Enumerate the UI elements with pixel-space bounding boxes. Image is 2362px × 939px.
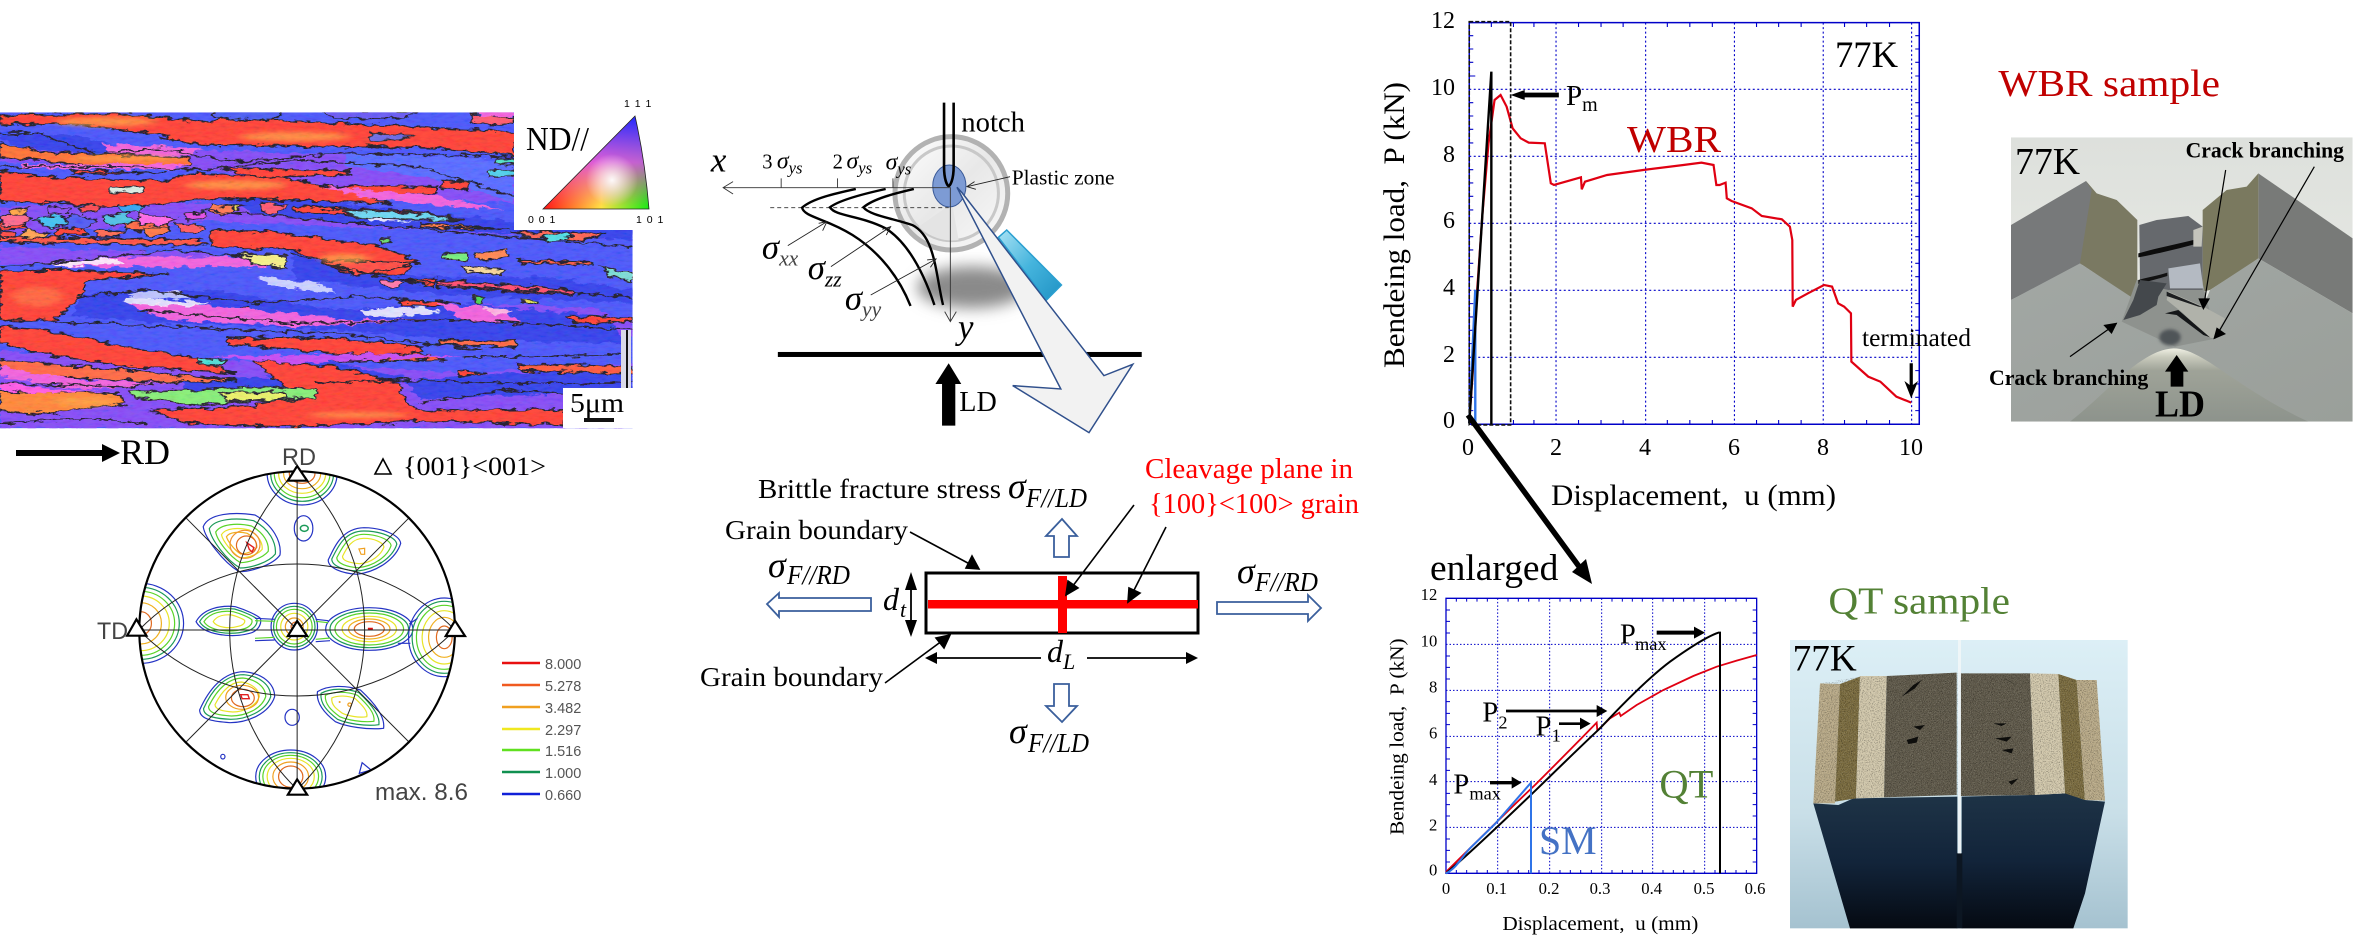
axis labels: σ [845,278,862,317]
tick labels: 0.6 [1745,879,1765,898]
panel: cleavage grain schematic [700,453,1359,758]
contour legend: 5.278 [545,679,581,695]
y axis tick labels: 8 [1443,142,1455,168]
QT temperature label: 77K [1793,639,1857,680]
pole labels: max. 8.6 [375,779,468,806]
axis labels: σ [847,148,858,174]
panel: WBR sample photo [1989,63,2353,426]
grain boundary labels: Grain boundary [725,515,909,545]
tick labels: 10 [1421,632,1437,651]
RD arrow label [16,432,170,472]
contour plot [125,463,467,796]
arrow: enlarge pointer [1468,415,1592,584]
brittle stress label: Brittle fracture stress [758,474,1001,504]
cleavage label: {100}<100> grain [1149,488,1359,520]
terminated label: terminated [1862,325,1972,352]
tick labels: 0.1 [1486,879,1507,898]
contour legend: 1.000 [545,766,581,782]
brittle stress label: F//LD [1025,483,1087,513]
LD arrow: LD [959,387,997,418]
tick labels: 0.4 [1641,879,1663,898]
crack pointers and load arrow [2070,167,2314,387]
dimension d_t [883,572,917,637]
panel: EBSD orientation map [0,98,664,472]
tick labels: 2 [1429,816,1437,835]
load point annotations: max [1469,783,1501,803]
fractured WBR specimen photo [2011,137,2353,422]
y axis tick labels: 2 [1443,342,1455,368]
axis labels: x [710,141,727,180]
cleavage label [1145,453,1359,520]
y axis tick labels [1431,8,1455,434]
pole labels [97,444,468,806]
grain boundary labels [700,515,909,692]
tick labels: 12 [1421,585,1437,604]
stress labels: F//RD [1254,567,1318,597]
load point annotations [1453,619,1705,803]
grain rectangle [926,573,1198,633]
texture orientation key: {001}<001> [403,452,546,481]
axis titles: Displacement, u (mm) [1502,913,1698,935]
series labels: QT [1659,761,1713,806]
axis labels: yy [860,298,882,322]
dimension d_t: d [883,581,900,617]
x axis tick labels: 2 [1550,435,1562,461]
grain boundary labels: Grain boundary [700,662,884,692]
y axis tick labels: 12 [1431,8,1455,34]
series labels [1539,761,1713,863]
black pointer arrows [885,505,1166,683]
contour legend: 8.000 [545,657,581,673]
sample labels [1989,139,2344,426]
axis labels: zz [824,267,842,291]
axis labels: 2 [833,151,843,173]
load point annotations: P [1482,698,1498,729]
axis labels: 3 [762,151,773,173]
dimension d_L: d [1047,633,1064,669]
tick labels: 4 [1429,770,1438,789]
inset: ND inverse pole figure: 0 0 1 [528,214,556,226]
dimension d_t: t [900,597,907,622]
panel: QT sample photo [1790,580,2128,928]
axis labels: y [955,307,974,346]
load point annotations: P [1620,619,1636,650]
axes [723,178,956,322]
tick labels: 8 [1429,678,1437,697]
stress labels: F//LD [1027,728,1089,758]
inset: ND inverse pole figure: 1 0 1 [636,214,664,226]
pole labels: RD [282,444,316,471]
inset: ND inverse pole figure: 1 1 1 [624,98,652,110]
tick labels: 0.5 [1694,879,1714,898]
chart plot area [1469,22,1919,425]
contour legend: 3.482 [545,701,581,717]
stress labels: F//RD [786,560,850,590]
stress labels: σ [1237,551,1256,591]
sample labels: LD [2155,384,2205,426]
WBR sample title: WBR sample [1998,63,2220,105]
hollow stress arrows [767,519,1321,722]
axis labels: ys [895,159,911,178]
x axis tick labels [1462,435,1923,461]
axis labels: σ [762,227,779,266]
series labels: SM [1539,818,1597,863]
tick labels: 0.2 [1539,879,1559,898]
WBR series label: WBR [1627,119,1722,161]
axis labels: σ [808,248,825,287]
tick labels: 0 [1442,879,1450,898]
x axis tick labels: 8 [1817,435,1829,461]
panel: notch stress diagram [710,103,1142,433]
tick labels [1421,585,1765,898]
load point annotations: 1 [1552,726,1561,746]
pole labels: TD [97,618,128,645]
axis labels: ys [856,158,872,177]
load point annotations: max [1635,634,1667,654]
fractured QT specimen photo [1790,640,2128,928]
Pm label: P [1566,80,1582,112]
axis titles: Bendeing load, P (kN) [1386,638,1408,835]
x axis tick labels: 6 [1728,435,1740,461]
contour legend: 0.660 [545,788,581,804]
axis labels: Plastic zone [1012,167,1115,189]
stress labels [768,545,1318,758]
scale bar 5 micrometres: 5μm [570,388,624,418]
plastic zone [933,165,966,207]
sample labels: Crack branching [2186,139,2344,163]
axis labels: notch [961,108,1025,139]
panel: load-displacement chart 77K [1378,8,1972,512]
axis labels: σ [777,148,789,174]
stress curves [802,189,943,306]
enlarged title: enlarged [1430,548,1559,589]
leader arrows [788,177,1010,295]
tick labels: 0.3 [1590,879,1610,898]
stress labels: σ [1009,711,1028,751]
temperature label: 77K [1835,35,1898,76]
axis titles [1386,638,1698,935]
big callout arrow [957,187,1133,433]
specimen edge line [778,352,1142,357]
enlarged plot [1446,598,1757,873]
axis labels: ys [787,158,802,177]
LD arrow [935,363,997,426]
axis labels [710,108,1115,346]
dimension d_L [925,633,1198,674]
brittle stress label [758,466,1087,513]
sample labels: 77K [2015,141,2080,183]
x axis tick labels: 4 [1639,435,1651,461]
contour legend: 2.297 [545,723,581,739]
stress labels: σ [768,545,787,585]
x axis title: Displacement, u (mm) [1551,479,1836,512]
axis labels: xx [778,247,799,271]
y axis tick labels: 6 [1443,208,1455,234]
contour legend: 1.516 [545,744,581,760]
tick labels: 0 [1429,861,1437,880]
notch [944,103,954,186]
load point annotations: P [1453,769,1469,800]
inset: ND inverse pole figure [514,98,664,230]
tick labels: 6 [1429,724,1437,743]
Pm label: m [1582,94,1598,116]
x axis tick labels: 10 [1899,435,1923,461]
y axis tick labels: 0 [1443,408,1455,434]
icon: magnifier [895,137,1061,308]
dimension d_L: L [1062,649,1075,674]
axis labels: σ [886,149,897,175]
load point annotations: P [1536,712,1551,743]
y axis title: Bendeing load, P (kN) [1378,82,1411,368]
sample labels: Crack branching [1989,366,2148,390]
panel: enlarged chart [1386,548,1765,935]
cleavage label: Cleavage plane in [1145,453,1353,485]
EBSD map image [0,110,633,428]
panel: pole figure [97,442,581,806]
QT sample title: QT sample [1828,580,2010,622]
y axis tick labels: 4 [1443,275,1455,301]
brittle stress label: σ [1008,466,1027,506]
x axis tick labels: 0 [1462,435,1474,461]
RD arrow label: RD [120,432,170,472]
y axis tick labels: 10 [1431,75,1455,101]
inset: ND inverse pole figure: ND// [526,121,590,158]
contour legend [502,657,581,804]
scale bar 5 micrometres [563,330,633,428]
load point annotations: 2 [1498,712,1508,732]
